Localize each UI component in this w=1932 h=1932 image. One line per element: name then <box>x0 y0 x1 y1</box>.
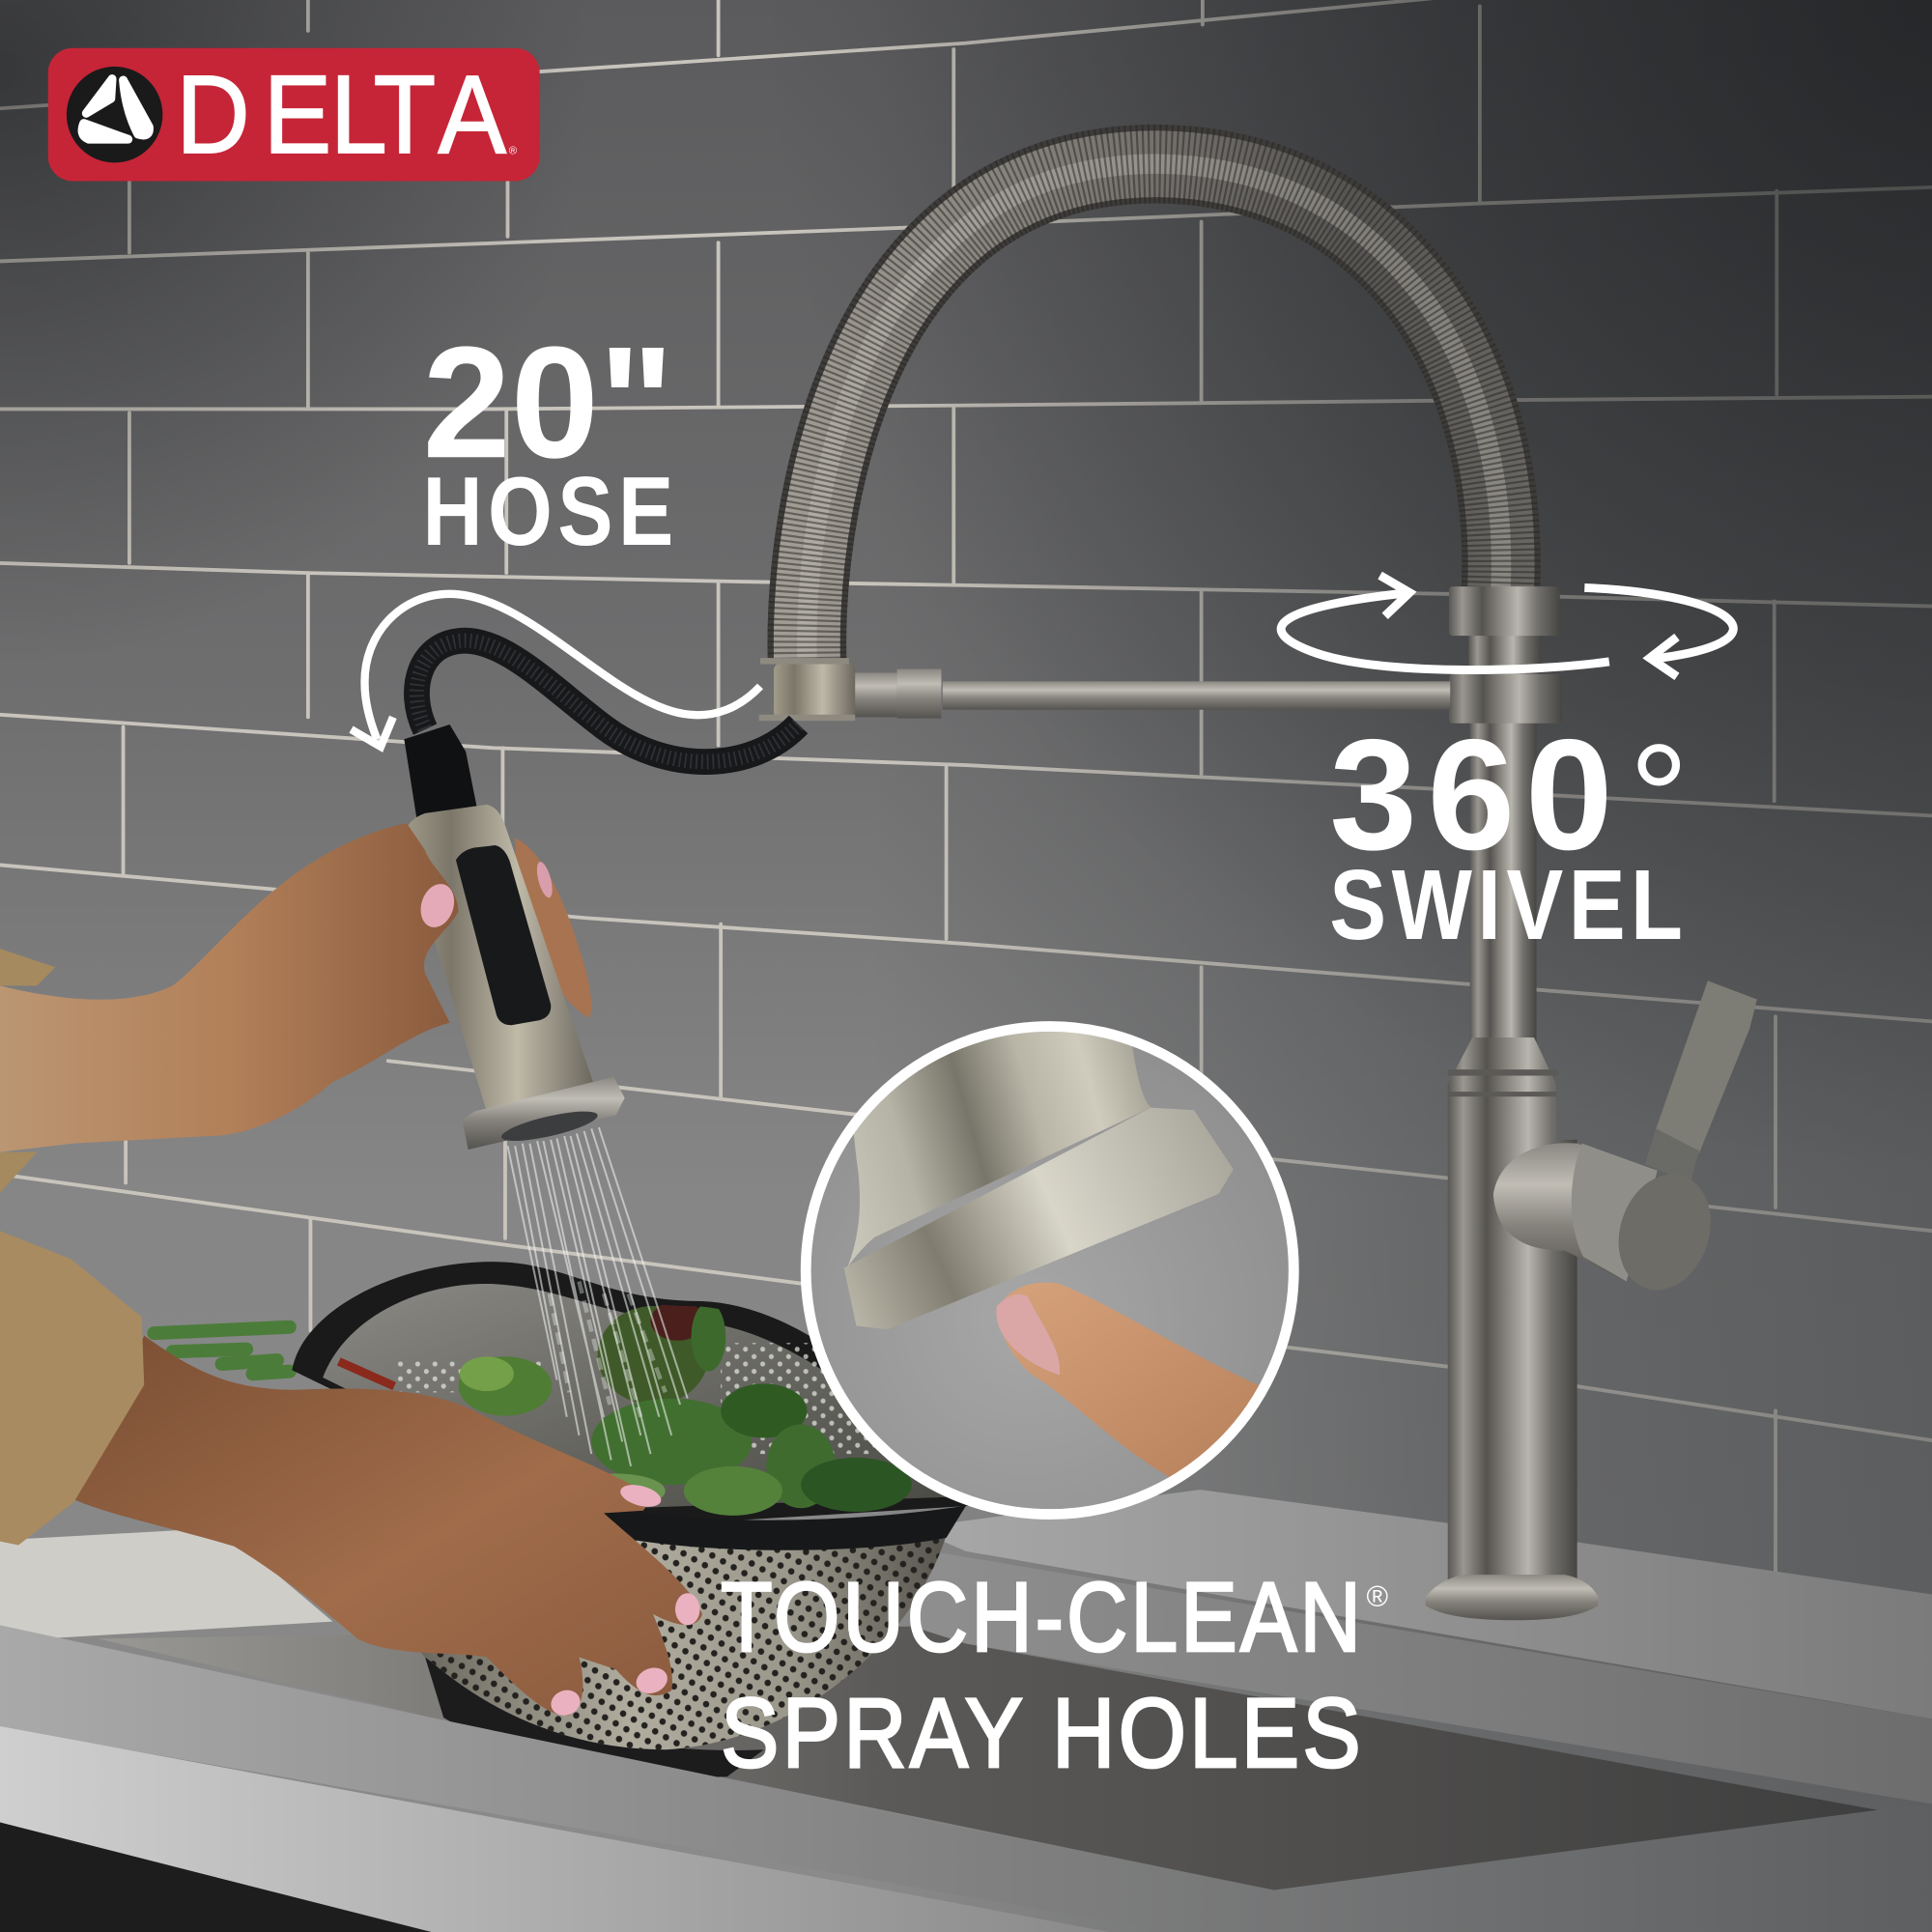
label: touch-clean spray holes: ® <box>1367 1580 1389 1613</box>
spray head <box>403 724 625 1150</box>
faucet <box>759 164 1757 1620</box>
spray head body <box>403 805 594 1123</box>
thumb nail <box>415 880 460 931</box>
colander bowl exterior <box>419 1516 949 1749</box>
colander back rim <box>292 1262 974 1528</box>
logo wordmark: DELTA <box>176 53 506 177</box>
colander <box>292 1262 974 1777</box>
logo mark <box>67 67 162 162</box>
colander front rim <box>594 1506 966 1550</box>
lower sleeve <box>0 1231 144 1545</box>
logo: Delta badge <box>48 48 540 181</box>
nozzle body <box>848 1032 1151 1265</box>
hose <box>416 640 799 762</box>
label: 360 degree swivel <box>1329 706 1689 960</box>
nozzle flange <box>844 1108 1234 1329</box>
water spray <box>508 1127 688 1466</box>
horizontal arm <box>759 658 1450 721</box>
label: 360 degree swivel: SWIVEL <box>1329 848 1688 960</box>
faucet body column <box>1426 721 1598 1620</box>
upper arm and hand <box>0 823 555 1193</box>
coiled spring spout <box>807 164 1501 659</box>
colander interior <box>323 1284 949 1509</box>
label: 20 inch hose: HOSE <box>423 458 679 566</box>
handle lever <box>1493 980 1757 1302</box>
registered mark: ® <box>509 145 518 156</box>
spray button panel <box>456 845 551 1025</box>
finger <box>1000 1283 1269 1485</box>
nails <box>548 1481 699 1719</box>
spray flange <box>462 1077 625 1150</box>
upper sleeve <box>0 949 55 1193</box>
spray head neck <box>404 724 478 833</box>
finger nail <box>534 861 555 899</box>
hose arrow <box>352 594 760 747</box>
lower arm and hand <box>0 1231 702 1719</box>
label: 360 degree swivel: ° <box>1629 713 1689 881</box>
swivel arrow <box>1281 576 1733 676</box>
swivel collars <box>1449 586 1562 724</box>
inset circle: touch-clean nozzle <box>806 985 1293 1515</box>
colander base <box>425 1658 764 1777</box>
finger nail <box>996 1294 1060 1375</box>
label: touch-clean spray holes: SPRAY HOLES <box>721 1678 1364 1788</box>
label: touch-clean spray holes: TOUCH-CLEAN <box>721 1562 1364 1672</box>
back countertop <box>0 1490 1932 1804</box>
salad greens <box>339 1301 912 1516</box>
green stalks <box>154 1327 290 1374</box>
label: 20 inch hose <box>423 313 679 566</box>
upper hand behind fingers <box>515 838 591 1018</box>
label: 20 inch hose: 20" <box>423 313 674 491</box>
sink basin <box>99 1627 1878 1890</box>
label: touch-clean spray holes <box>721 1562 1389 1788</box>
foreground countertop <box>0 1625 1932 1932</box>
label: 360 degree swivel: 360 <box>1329 706 1613 883</box>
